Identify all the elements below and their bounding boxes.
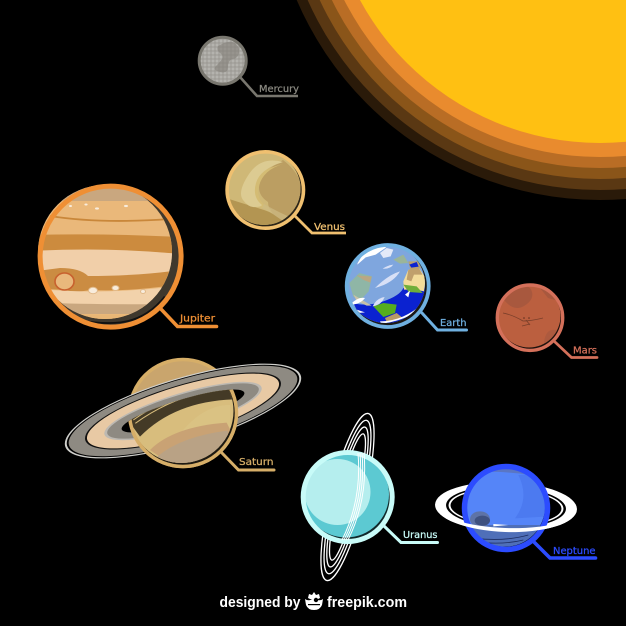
Uranus label: Uranus xyxy=(403,530,438,541)
planet: Mercury xyxy=(195,35,299,96)
planet: Mars xyxy=(490,280,597,358)
Uranus rings in front xyxy=(342,453,365,540)
Mercury leader line xyxy=(240,77,298,96)
Jupiter great red spot xyxy=(55,273,74,290)
Mars leader line xyxy=(555,342,597,358)
planet: Jupiter xyxy=(30,185,216,327)
planet: Neptune xyxy=(434,460,596,558)
Uranus leader line xyxy=(384,526,438,542)
Neptune body xyxy=(462,464,550,552)
Earth leader line xyxy=(422,313,466,330)
Neptune ring in front xyxy=(440,511,577,532)
Mars label: Mars xyxy=(573,346,597,356)
Saturn front of body xyxy=(128,390,238,468)
icon: freepik logo xyxy=(305,592,323,610)
Neptune label: Neptune xyxy=(553,546,596,557)
footer credit xyxy=(220,592,407,611)
Neptune ring behind xyxy=(434,480,578,534)
Mercury label: Mercury xyxy=(259,84,299,95)
Uranus rings behind xyxy=(310,409,385,585)
sun xyxy=(270,0,626,200)
Saturn rings xyxy=(56,344,310,478)
footer credit: designed by xyxy=(220,595,300,611)
Jupiter leader line xyxy=(160,308,216,326)
Saturn label: Saturn xyxy=(239,457,274,468)
Jupiter label: Jupiter xyxy=(179,314,215,324)
Venus label: Venus xyxy=(314,222,345,233)
Venus leader line xyxy=(295,216,346,233)
Neptune leader line xyxy=(534,542,596,558)
Saturn leader line xyxy=(222,453,274,470)
planet: Venus xyxy=(220,145,346,235)
planet: Earth xyxy=(340,238,466,333)
planet: Saturn xyxy=(64,358,302,472)
Earth label: Earth xyxy=(440,318,466,329)
Jupiter spots xyxy=(69,204,146,294)
Saturn back of body xyxy=(130,360,236,466)
planet: Uranus xyxy=(303,409,438,585)
freepik name: freepik.com xyxy=(327,595,407,611)
Uranus body xyxy=(303,452,393,542)
